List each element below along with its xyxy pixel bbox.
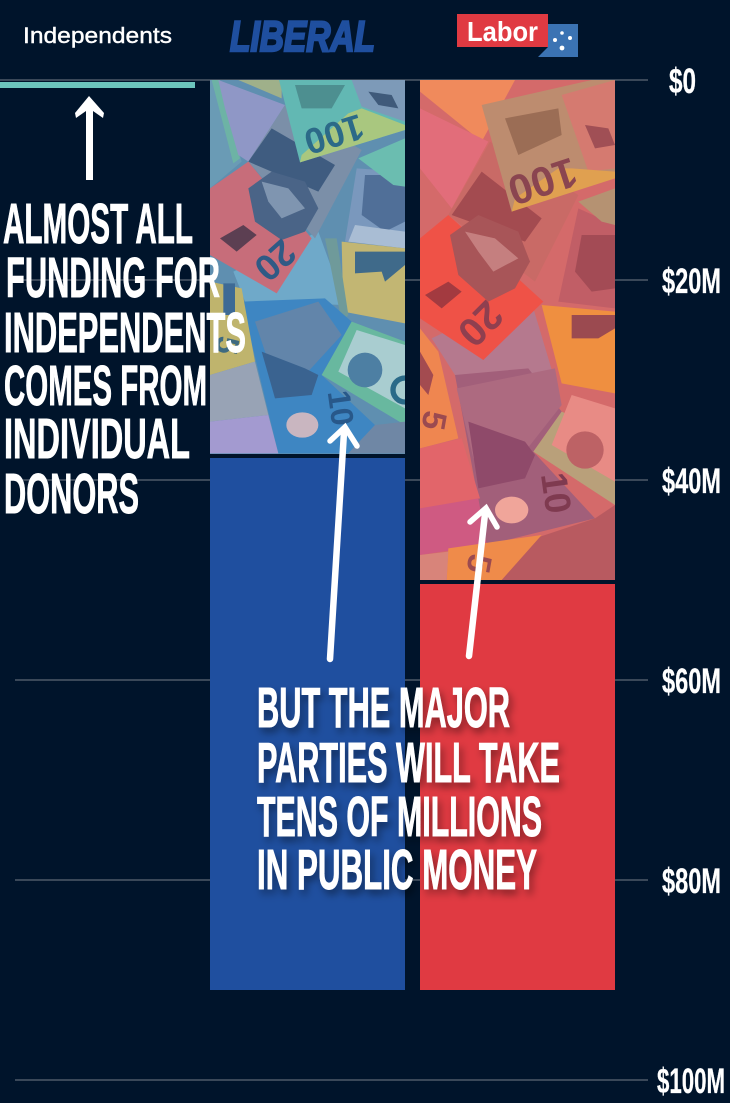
bar: Liberal public funding [208, 80, 417, 990]
banknote collage: blue tint: 10 [321, 388, 361, 428]
banknote collage: red tint [414, 80, 615, 582]
arrow: to independents bar [75, 96, 104, 180]
callout: independents: FUNDING FOR [6, 246, 220, 310]
banknote collage: red tint: 5 [459, 551, 498, 576]
arrow: to Liberal bar [330, 427, 357, 659]
banknote collage: red tint: 5 [414, 408, 453, 433]
column heading: Independents: Independents [23, 23, 172, 48]
bar: Labor public funding [414, 80, 615, 990]
callout: major parties [257, 676, 560, 902]
banknote collage: blue tint: 20 [246, 232, 304, 289]
callout: independents: INDIVIDUAL [4, 407, 190, 471]
banknote collage: blue tint: 5 [208, 334, 247, 357]
logo: Labor [457, 14, 578, 57]
callout: independents: COMES FROM [4, 354, 207, 418]
banknote collage: red tint: 100 [502, 149, 583, 215]
banknote collage: red tint: 10 [533, 470, 579, 516]
logo: Labor: Labor [467, 16, 538, 47]
independents bar [0, 82, 195, 88]
banknote collage: blue tint: 100 [300, 106, 369, 163]
callout: independents: ALMOST ALL [3, 192, 193, 256]
callout: independents: INDEPENDENTS [4, 301, 246, 365]
callout: independents [3, 192, 246, 526]
axis labels: $0 [669, 62, 696, 101]
banknote collage: red tint: 20 [449, 292, 511, 355]
arrow: to Labor bar [469, 508, 497, 656]
callout: major parties: BUT THE MAJOR [257, 676, 510, 740]
banknote collage: blue tint [208, 80, 417, 455]
axis labels [657, 62, 725, 1101]
logo: Liberal: LIBERAL [230, 13, 375, 61]
callout: independents: DONORS [4, 462, 139, 526]
